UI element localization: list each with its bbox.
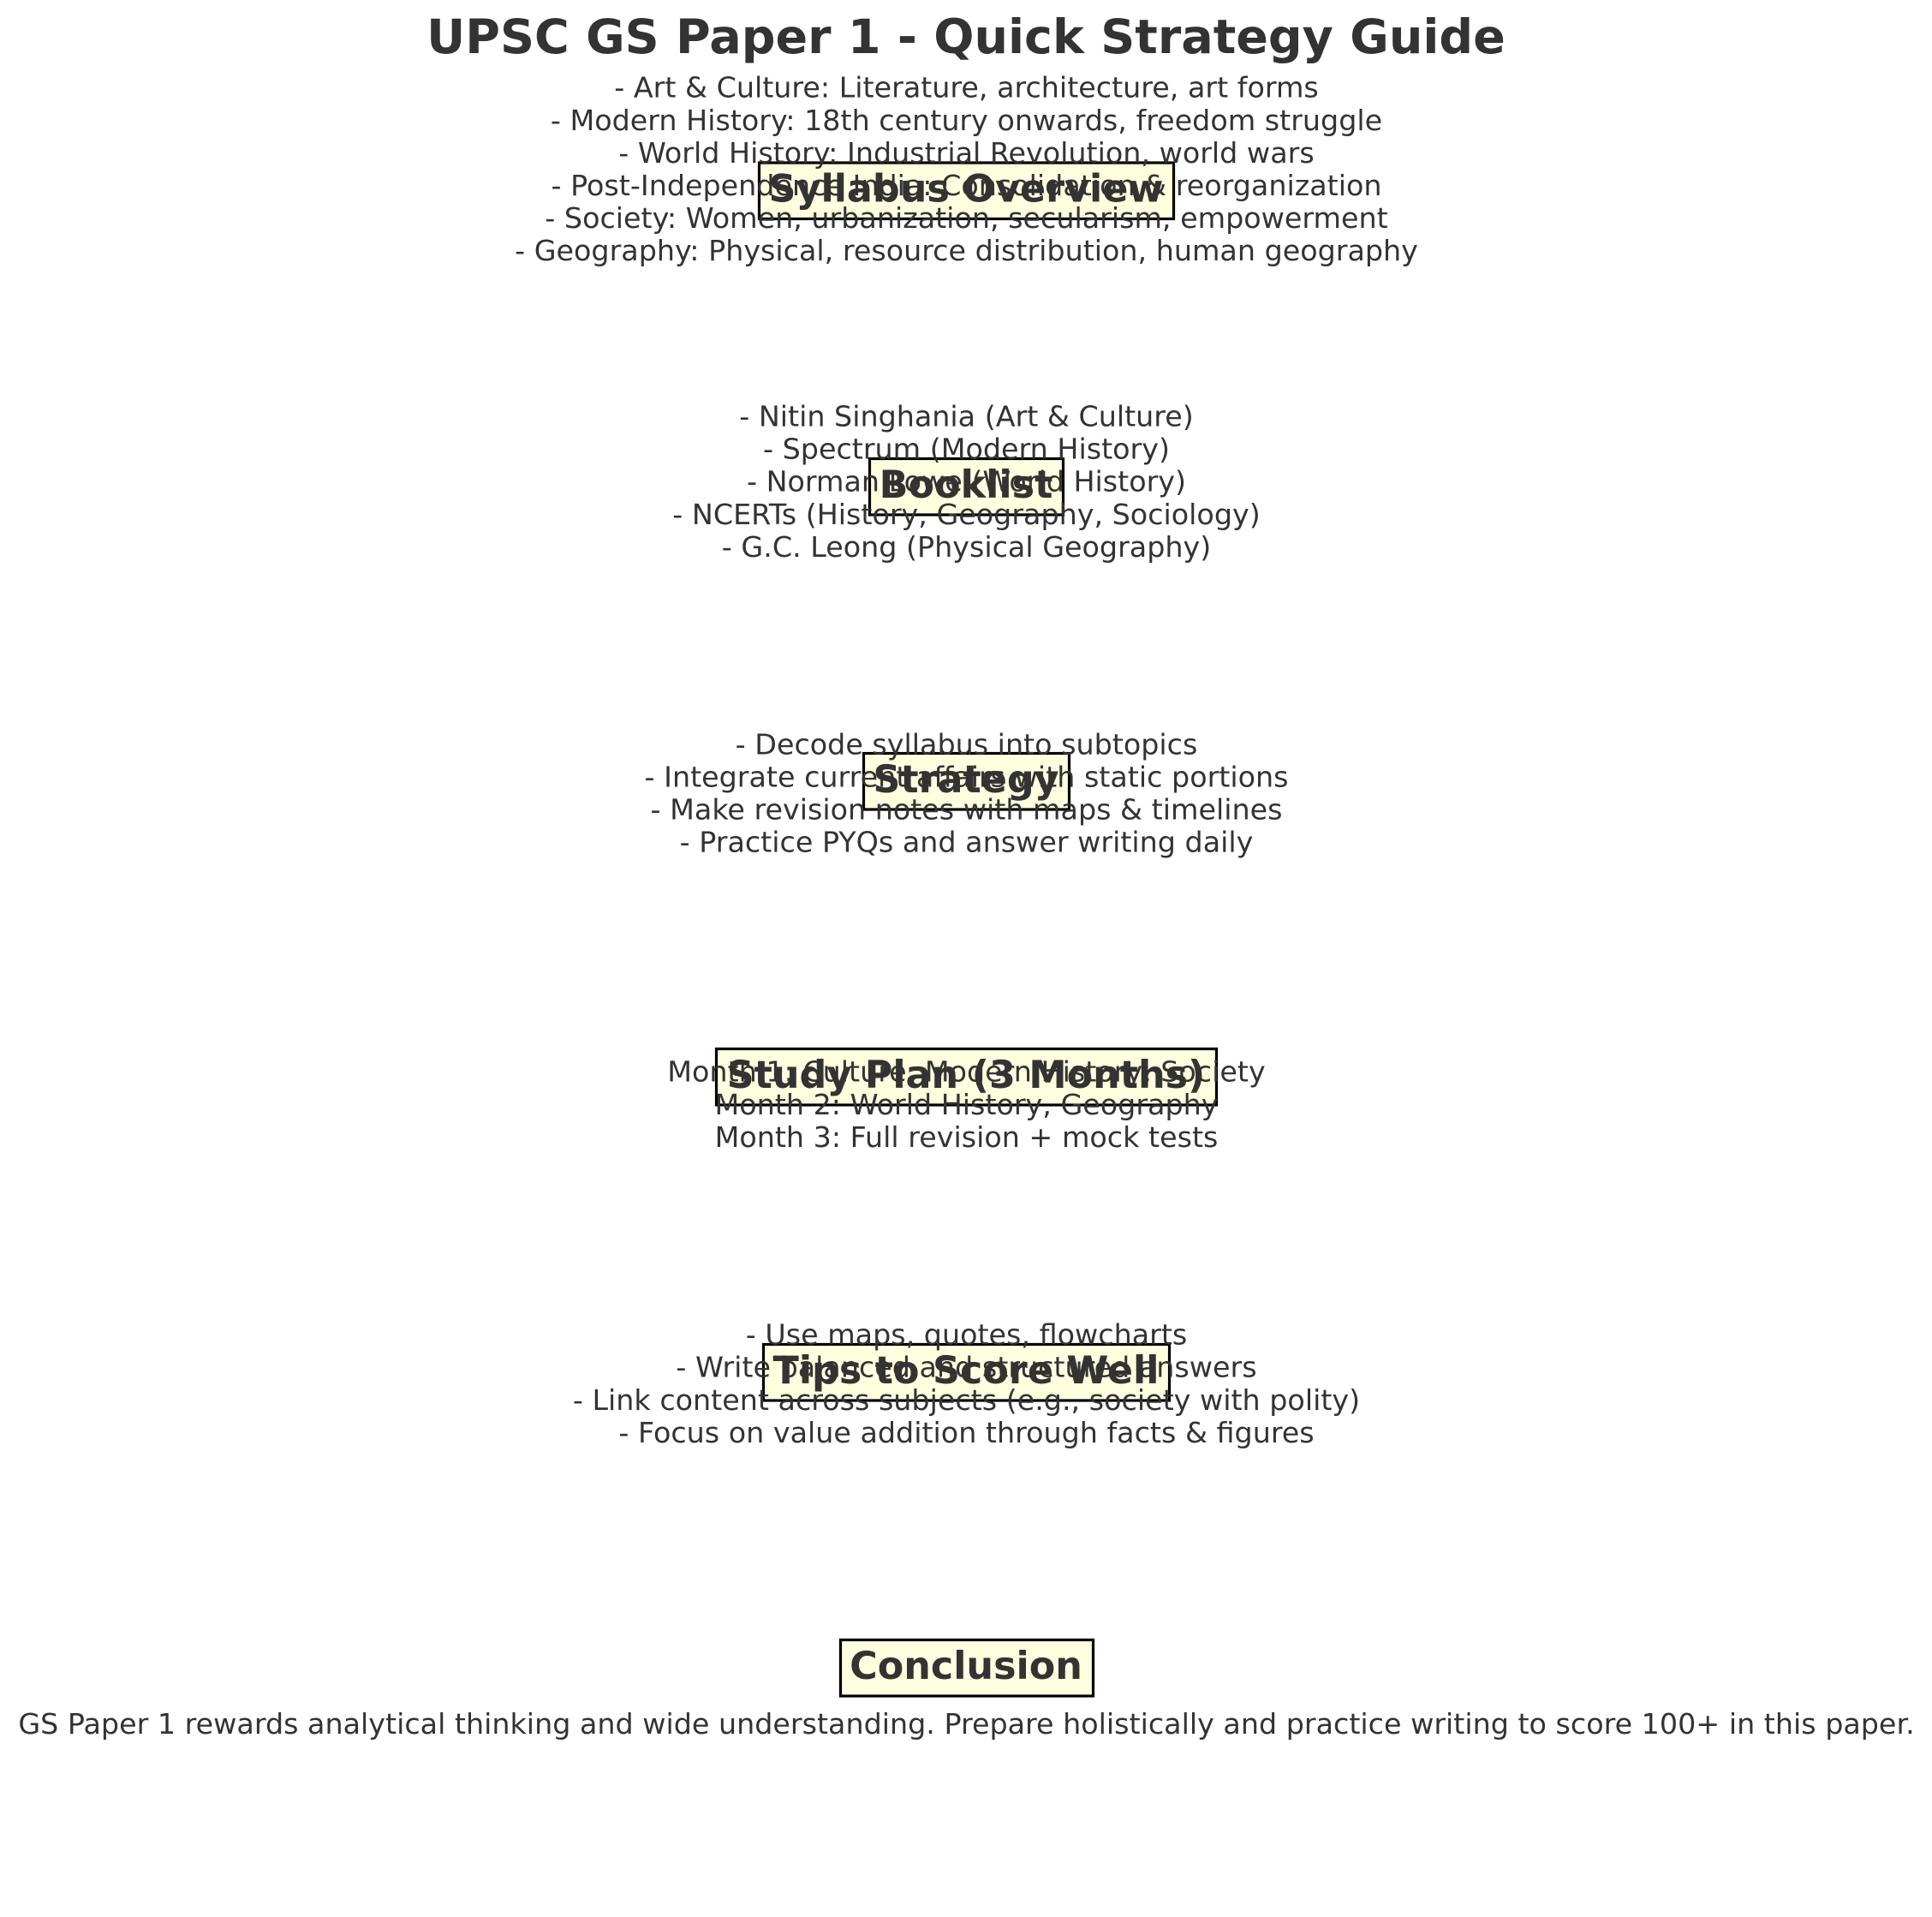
tips text block: - Write balanced and structured answers <box>676 1350 1257 1384</box>
syllabus text block: - Society: Women, urbanization, secularism, empowerment <box>545 201 1388 235</box>
strategy text block: - Make revision notes with maps & timelines <box>651 793 1282 826</box>
booklist heading box <box>870 459 1064 515</box>
tips heading box: Tips to Score Well <box>773 1349 1159 1393</box>
syllabus text block: - Art & Culture: Literature, architecture, art forms <box>614 70 1319 105</box>
strategy text block: - Decode syllabus into subtopics <box>736 728 1197 761</box>
tips text block <box>573 1317 1360 1449</box>
strategy heading box: Strategy <box>873 758 1059 802</box>
title: UPSC GS Paper 1 - Quick Strategy Guide <box>426 9 1506 65</box>
booklist text block: - Nitin Singhania (Art & Culture) <box>739 399 1194 433</box>
syllabus text block: - Post-Independence India: Consolidation & reorganization <box>552 169 1381 202</box>
panel: syllabus overview <box>515 70 1418 267</box>
conclusion text block: GS Paper 1 rewards analytical thinking and wide understanding. Prepare holistically and practice writing to score 100+ in this paper. <box>18 1707 1915 1741</box>
study plan text block: Month 2: World History, Geography <box>715 1088 1218 1121</box>
conclusion heading box: Conclusion <box>850 1645 1082 1688</box>
syllabus text block: - Geography: Physical, resource distribution, human geography <box>515 234 1418 267</box>
tips text block: - Focus on value addition through facts & figures <box>618 1416 1315 1449</box>
tips text block: - Use maps, quotes, flowcharts <box>746 1317 1187 1352</box>
strategy text block <box>644 728 1288 858</box>
booklist text block: - G.C. Leong (Physical Geography) <box>722 530 1211 564</box>
panel: study plan <box>667 1048 1266 1154</box>
booklist text block: - Spectrum (Modern History) <box>763 432 1170 466</box>
study plan heading box: Study Plan (3 Months) <box>727 1054 1205 1097</box>
tips text block: - Link content across subjects (e.g., society with polity) <box>573 1383 1360 1417</box>
panel: booklist <box>672 399 1261 564</box>
study plan text block: Month 3: Full revision + mock tests <box>715 1120 1218 1154</box>
study plan text block: Month 1: Culture, Modern History, Society <box>667 1055 1266 1088</box>
booklist text block: - Norman Lowe (World History) <box>747 464 1186 499</box>
panel: conclusion <box>18 1639 1915 1741</box>
syllabus text block: - Modern History: 18th century onwards, freedom struggle <box>551 104 1382 137</box>
strategy text block: - Practice PYQs and answer writing daily <box>680 826 1253 858</box>
syllabus text block: - World History: Industrial Revolution, world wars <box>618 136 1315 170</box>
study plan text block <box>667 1055 1266 1154</box>
panel: strategy <box>644 728 1288 858</box>
booklist text block: - NCERTs (History, Geography, Sociology) <box>672 498 1261 531</box>
syllabus text block <box>515 70 1418 267</box>
syllabus heading box: Syllabus Overview <box>769 168 1163 211</box>
panel: tips to score well <box>573 1317 1360 1449</box>
strategy text block: - Integrate current affairs with static portions <box>644 761 1288 793</box>
booklist text block <box>672 399 1261 564</box>
booklist heading box: Booklist <box>880 463 1052 507</box>
